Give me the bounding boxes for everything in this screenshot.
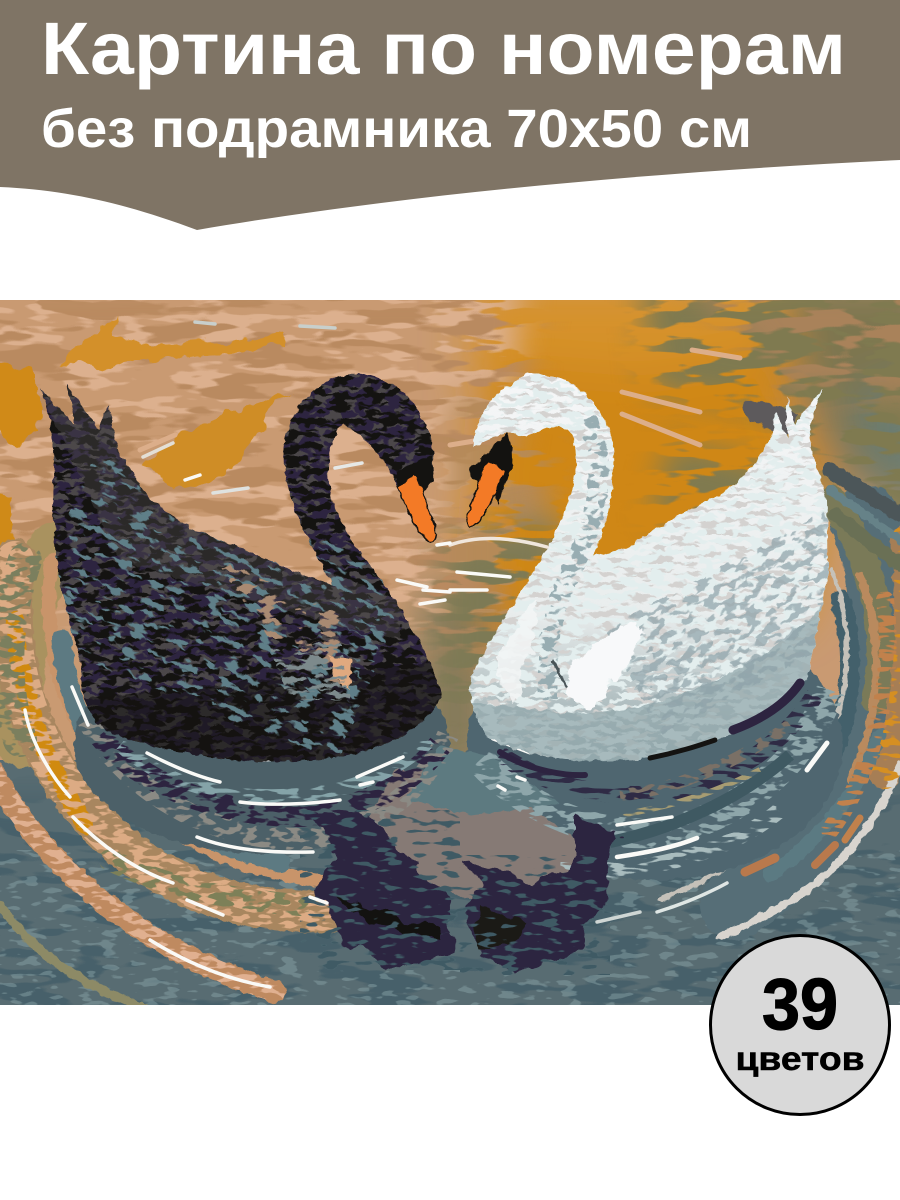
ring strokes under the swans [88,690,830,871]
white swan neck shading [547,420,599,700]
black swan [22,370,450,770]
white water glints [25,322,827,987]
orange strokes [0,316,798,546]
upper water: tan, orange and olive paint [0,300,900,760]
soft colour zones [420,280,900,780]
swan reflections [310,812,618,972]
white swan lower shading [472,608,822,762]
light and dark tan brush patches [0,280,520,620]
pale tan streaks on orange water [140,350,740,450]
white swan [466,372,829,762]
black swan wing highlights [55,459,399,754]
teal streaks on reflections [300,810,610,975]
black swan beak [398,473,437,542]
black swan body clipped fill [22,370,450,770]
mauve water between reflections [370,770,590,905]
dark water around the swans [73,669,843,899]
ripple paint flecks, right side [745,540,900,872]
badge label: цветов [736,1040,864,1077]
black swan face [396,455,434,492]
header banner [0,0,900,230]
bright wing highlight [562,625,640,706]
white swan black face mask [470,432,512,505]
olive and tan patches on the right [622,300,900,506]
badge number: 39 [762,965,838,1045]
lower water base [0,760,900,1005]
white swan body clipped fill [468,372,829,762]
dark shadow below white swan [500,683,800,775]
white swan beak [466,460,505,527]
badge: 39 colours [710,936,890,1114]
ripple bands, right side [660,470,900,937]
subtitle: без подрамника 70х50 см [41,99,752,159]
ripple paint flecks, left side [0,560,330,992]
painting: two swans on a pond [0,280,900,1060]
title: Картина по номерам [41,7,846,90]
ripple bands, left side [0,550,360,1010]
